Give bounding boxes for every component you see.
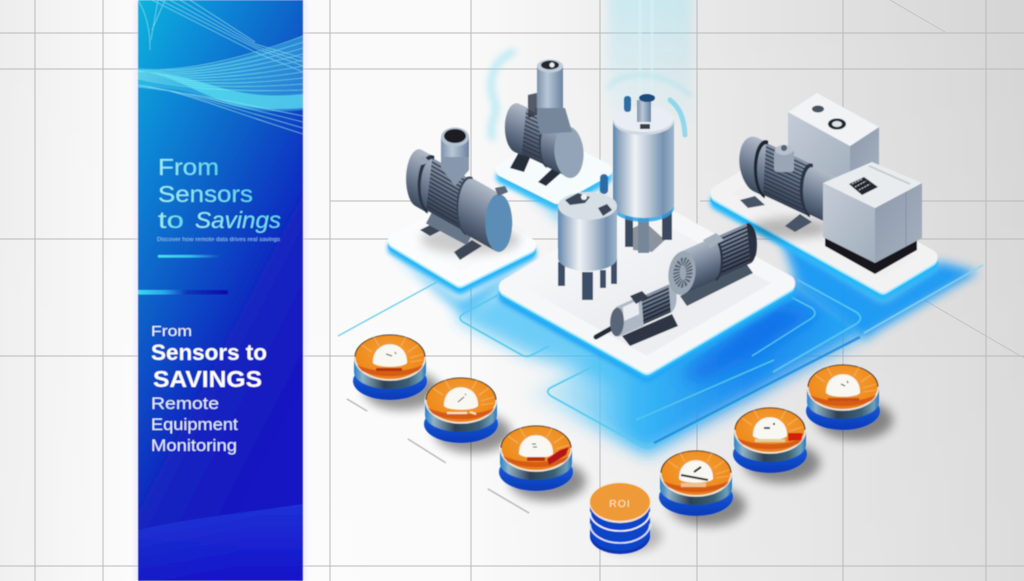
heading: upper light title: Sensors <box>158 181 253 207</box>
platform: right equipment <box>718 165 930 294</box>
gauge 2 label <box>408 439 446 463</box>
ROI label: ROI <box>609 498 631 510</box>
gauge 1 label <box>347 399 367 411</box>
gauge 6 <box>806 364 893 440</box>
icon: medium motor <box>666 219 759 306</box>
gauge 1 <box>353 334 440 410</box>
back cabinet <box>788 93 879 190</box>
circuit outlines <box>338 265 983 448</box>
heading: upper light title: to <box>158 207 184 233</box>
heading: lower white title: From <box>151 323 192 340</box>
heading: upper light title: Savings <box>195 207 282 233</box>
front cabinet <box>823 162 922 274</box>
wave pattern: top cyan line mesh <box>138 0 303 134</box>
text block: subtitle <box>151 394 238 455</box>
text block: subtitle: Monitoring <box>151 436 237 455</box>
divider: upper accent rule <box>158 255 220 258</box>
icon: pump motor two <box>503 60 586 186</box>
text block: tiny tagline: Discover how remote data drives real savings <box>157 237 280 243</box>
panel: blue title sidebar <box>134 0 307 581</box>
icon: ROI coin stack <box>590 483 662 554</box>
icon: right motor and control boxes <box>738 93 922 274</box>
gauge 4 <box>659 450 746 526</box>
motor body <box>738 130 844 232</box>
heading: lower white title: Sensors to <box>151 340 267 365</box>
blue glow beneath platforms <box>392 185 978 455</box>
heading: upper light title: From <box>158 154 219 180</box>
icon: tall steel tank <box>613 94 674 253</box>
text block: subtitle: Remote <box>151 394 219 413</box>
platform: centre <box>507 205 787 374</box>
gauge 3 <box>499 426 586 501</box>
platform: pump two <box>503 143 605 204</box>
divider: lower accent rule <box>138 290 228 294</box>
icon: small motor <box>596 280 678 346</box>
gauge 3 label <box>488 489 529 513</box>
heading: upper light title <box>158 154 282 233</box>
gauge 5 <box>733 408 820 483</box>
heading: lower white title: SAVINGS <box>153 366 262 392</box>
gauge 2 <box>424 378 511 453</box>
platform: motor one <box>395 206 529 287</box>
text block: subtitle: Equipment <box>151 415 238 434</box>
icon: pump motor one <box>403 128 520 260</box>
wave pattern: bottom blue swell <box>138 504 303 581</box>
icon: halo arcs <box>491 52 690 138</box>
light beam above the tall tank <box>608 0 692 120</box>
heading: lower white title <box>151 323 267 392</box>
icon: short steel tank <box>558 174 617 300</box>
